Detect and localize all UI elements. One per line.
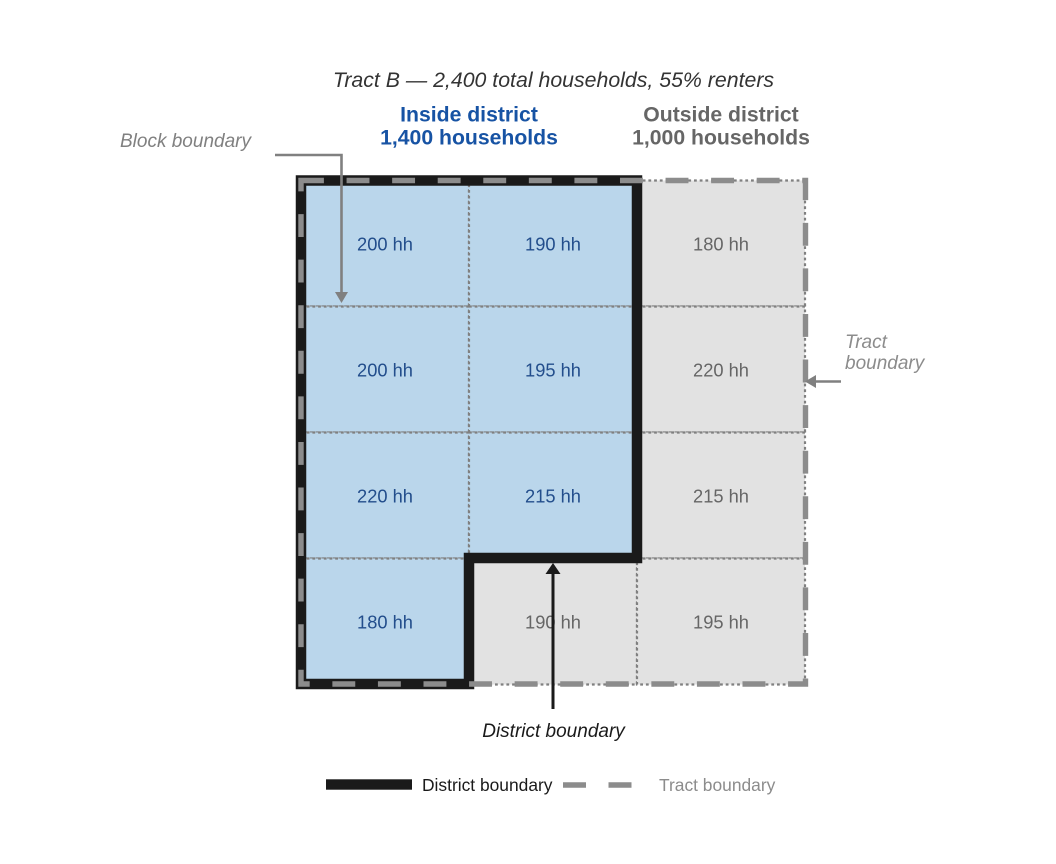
household labels: inside district: 200 hh (357, 360, 413, 380)
arrow: district boundary (546, 563, 560, 709)
arrow: tract boundary (805, 375, 841, 388)
label: tract boundary: Tract (845, 332, 888, 353)
legend (326, 775, 776, 795)
district boundary (301, 180, 637, 684)
legend swatch: district boundary (326, 779, 412, 790)
household labels: inside district (357, 234, 581, 632)
household labels: inside district: 215 hh (525, 486, 581, 506)
household labels: outside district: 215 hh (693, 486, 749, 506)
legend swatch: tract boundary (563, 782, 632, 788)
label: block boundary: Block boundary (120, 131, 252, 152)
heading: outside district: 1,000 households (632, 126, 810, 150)
block grid (301, 180, 805, 684)
heading: outside district: Outside district (643, 104, 799, 126)
heading: outside district (632, 104, 810, 150)
tract boundary (301, 180, 806, 684)
household labels: outside district: 180 hh (693, 234, 749, 254)
title: Tract B — 2,400 total households, 55% renters (333, 68, 774, 92)
arrow: block boundary (275, 155, 348, 303)
household labels: inside district: 195 hh (525, 360, 581, 380)
label: district boundary: District boundary (482, 721, 626, 742)
heading: inside district: 1,400 households (380, 126, 558, 150)
heading: inside district (380, 104, 558, 150)
legend label: tract boundary: Tract boundary (659, 775, 776, 795)
heading: inside district: Inside district (400, 104, 538, 126)
household labels: outside district: 190 hh (525, 612, 581, 632)
household labels: outside district (525, 234, 749, 632)
block: inside district blocks (301, 180, 637, 684)
legend label: district boundary: District boundary (422, 775, 553, 795)
household labels: inside district: 220 hh (357, 486, 413, 506)
household labels: inside district: 180 hh (357, 612, 413, 632)
label: tract boundary (845, 332, 926, 374)
household labels: inside district: 200 hh (357, 234, 413, 254)
label: tract boundary: boundary (845, 353, 926, 374)
block: outside district blocks (469, 180, 805, 684)
household labels: outside district: 195 hh (693, 612, 749, 632)
household labels: inside district: 190 hh (525, 234, 581, 254)
household labels: outside district: 220 hh (693, 360, 749, 380)
